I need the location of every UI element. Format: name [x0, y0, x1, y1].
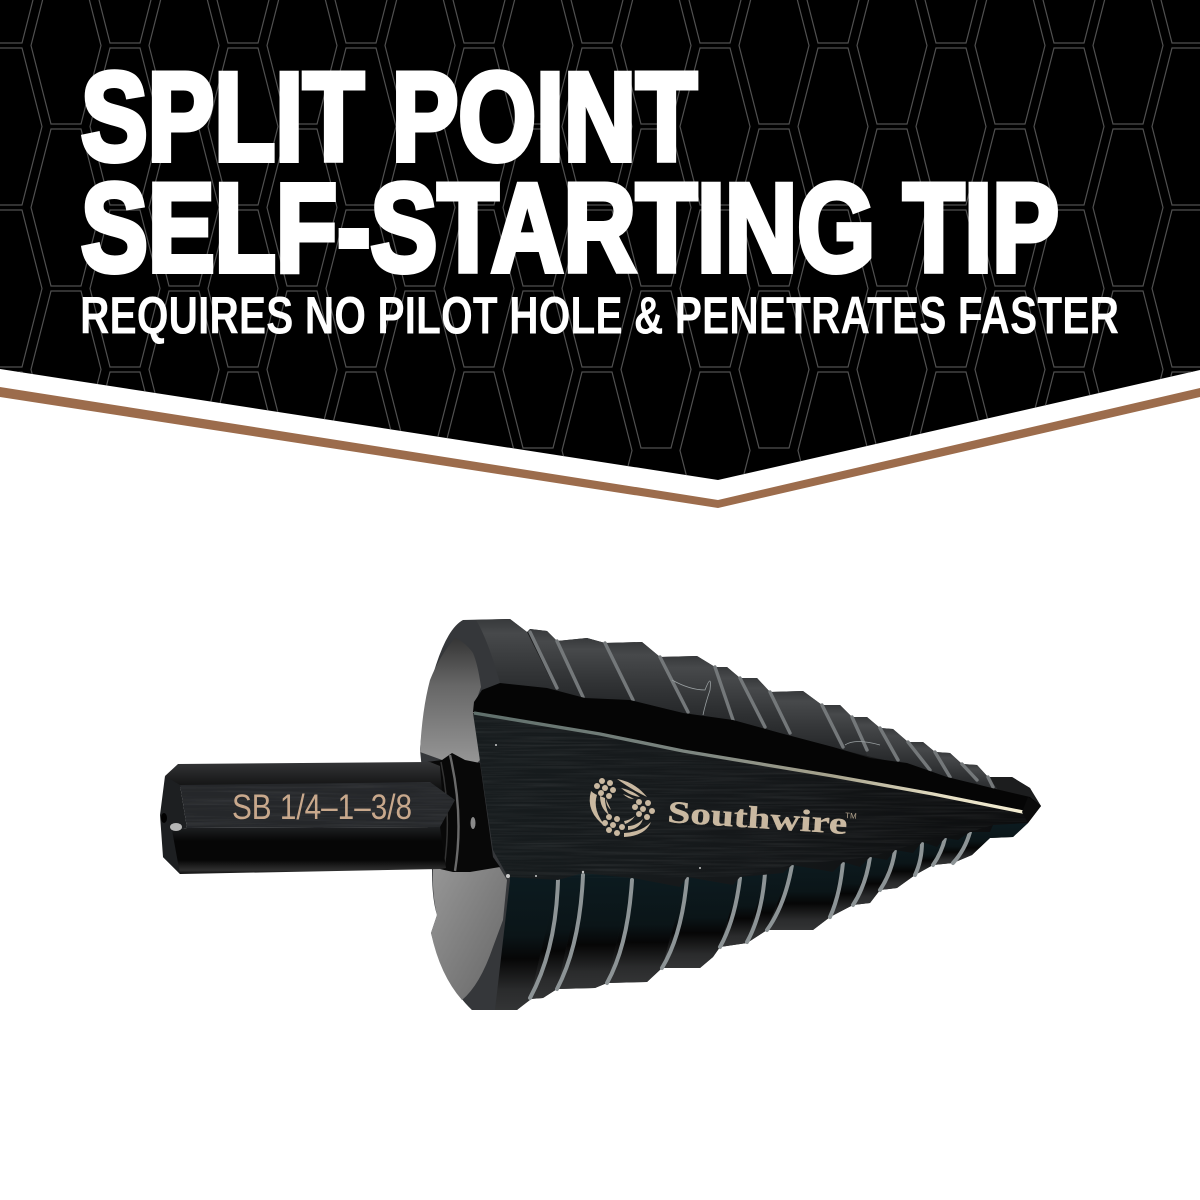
shank etching: SB 1/4–1–3/8	[232, 788, 412, 827]
drill silhouette base	[455, 619, 1041, 1010]
brand logo mark	[590, 778, 655, 837]
main flute face	[473, 713, 1028, 887]
lower step highlights	[530, 832, 970, 998]
headline	[81, 48, 1059, 298]
surface specks	[495, 744, 701, 878]
header banner with hexagon pattern	[0, 0, 1200, 529]
upper step highlights	[530, 632, 993, 787]
lower spiral steps	[472, 823, 1028, 1010]
tip point	[1022, 797, 1041, 823]
trademark: TM	[845, 811, 857, 821]
headline: SPLIT POINT	[81, 48, 697, 187]
disk rear face lower	[431, 860, 507, 1000]
hex shank	[160, 762, 455, 874]
shank flat texture	[180, 782, 455, 828]
stray fibres	[672, 680, 880, 745]
step drill bit product illustration	[160, 619, 1041, 1010]
upper spiral steps	[475, 619, 1036, 800]
shank collar	[427, 753, 500, 872]
brand wordmark: Southwire	[667, 794, 848, 841]
copper chevron stripe	[0, 387, 1200, 508]
disk chamfer	[420, 620, 510, 1010]
ridge highlight	[474, 713, 1028, 813]
flute face brushed texture	[473, 713, 1028, 878]
black flute fracture band	[473, 683, 1041, 814]
disk rear face upper	[420, 638, 481, 770]
